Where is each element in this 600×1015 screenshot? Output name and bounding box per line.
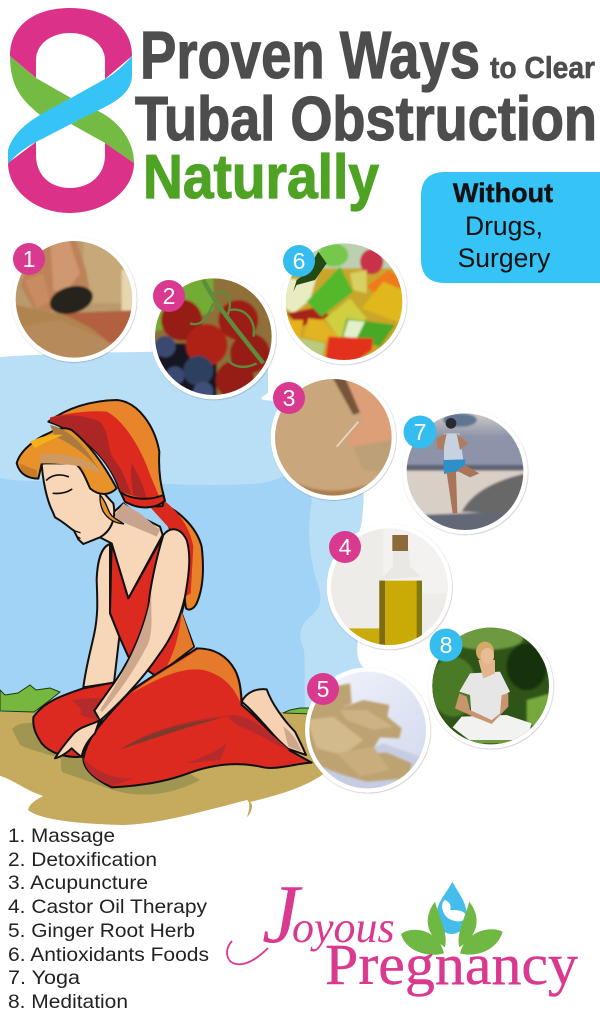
- pink bottom loop: [8, 142, 134, 213]
- badge 2: [153, 280, 185, 312]
- number badges: [13, 243, 462, 705]
- photo circles: first row: [11, 237, 408, 501]
- photo circles: second group: [300, 409, 553, 793]
- logo word Joyous: oyous: [292, 903, 395, 952]
- hair: [17, 428, 117, 494]
- photo 7: yoga tree pose: [402, 409, 529, 536]
- hand: [55, 721, 99, 758]
- photo 1: massage stones: [11, 237, 138, 363]
- list of eight methods: [8, 825, 209, 1013]
- logo mark: drop with fetus and leaves: [401, 882, 503, 955]
- green left band: [10, 56, 71, 115]
- badge 3: [273, 382, 305, 414]
- left arm: [83, 544, 119, 687]
- eyebrow and eye: [47, 475, 72, 493]
- badge 1: 1: [23, 246, 35, 272]
- hood red band: [50, 411, 160, 499]
- photo 3: acupuncture: [270, 374, 397, 501]
- background: light blue sky blob: [0, 352, 370, 720]
- badge 1: [13, 243, 45, 275]
- callout: without drugs, surgery: Drugs,: [465, 211, 543, 241]
- scarf knot: [121, 493, 165, 507]
- list of eight methods: 7. Yoga: [8, 967, 80, 989]
- photo 6: vegetable salad: [281, 239, 408, 366]
- photo 2: tomatoes and berries: [150, 274, 277, 400]
- list of eight methods: 1. Massage: [8, 825, 115, 847]
- badge 8: [430, 628, 462, 662]
- skirt orange highlight: [132, 649, 240, 702]
- grass left: [0, 685, 60, 712]
- badge 8: 8: [440, 632, 452, 658]
- list of eight methods: 3. Acupuncture: [8, 872, 148, 894]
- badge 4: [329, 531, 361, 563]
- callout: without drugs, surgery: Without: [453, 178, 553, 208]
- callout: without drugs, surgery: Surgery: [458, 243, 551, 273]
- title line 1: Proven Ways: [140, 18, 480, 93]
- face: [42, 463, 114, 544]
- callout: without drugs, surgery: [421, 172, 600, 283]
- green right band: [71, 110, 134, 163]
- photo 5: ginger root: [300, 667, 430, 793]
- badge 7: [404, 416, 436, 448]
- mouth: [74, 531, 80, 538]
- ground: [0, 712, 340, 825]
- headscarf tail: [160, 503, 203, 610]
- badge 6: 6: [293, 248, 305, 274]
- skirt main: [83, 648, 312, 787]
- list of eight methods: 2. Detoxification: [8, 849, 157, 871]
- front arm: [94, 529, 189, 721]
- ground shadow under figure: [12, 723, 200, 795]
- badge 3: 3: [283, 385, 295, 411]
- Joyous Pregnancy logo: [227, 868, 578, 997]
- illustration: kneeling woman in red: [17, 400, 312, 787]
- badge 2: 2: [163, 283, 175, 309]
- dress torso: [110, 537, 194, 677]
- skirt folds: [120, 715, 290, 751]
- list of eight methods: 6. Antioxidants Foods: [8, 944, 209, 966]
- list of eight methods: 8. Meditation: [8, 991, 128, 1013]
- blue crossing band: [8, 56, 132, 164]
- left knee of skirt: [33, 683, 114, 757]
- neck and chest: [83, 503, 163, 598]
- hair strand: [100, 495, 124, 524]
- hood: [48, 400, 164, 506]
- badge 5: 5: [317, 676, 329, 702]
- list of eight methods: 4. Castor Oil Therapy: [8, 896, 207, 918]
- background: darker blue sky: [0, 470, 320, 720]
- photo 8: meditation: [428, 623, 553, 749]
- title line 3: Naturally: [143, 143, 379, 212]
- grass right: [283, 708, 312, 714]
- foot: [242, 689, 306, 755]
- list of eight methods: 5. Ginger Root Herb: [8, 920, 195, 942]
- logo swash: [227, 941, 268, 964]
- big number 8 logo: [8, 8, 134, 213]
- logo word Joyous: J: [262, 868, 303, 961]
- badge 4: 4: [339, 534, 352, 560]
- photo 4: castor oil bottle: [327, 524, 452, 649]
- badge 7: 7: [414, 419, 426, 445]
- badge 5: [307, 673, 339, 705]
- badge 6: [283, 245, 315, 277]
- title: [135, 18, 597, 212]
- pink top loop: [10, 8, 132, 79]
- logo word Pregnancy: Pregnancy: [325, 932, 578, 997]
